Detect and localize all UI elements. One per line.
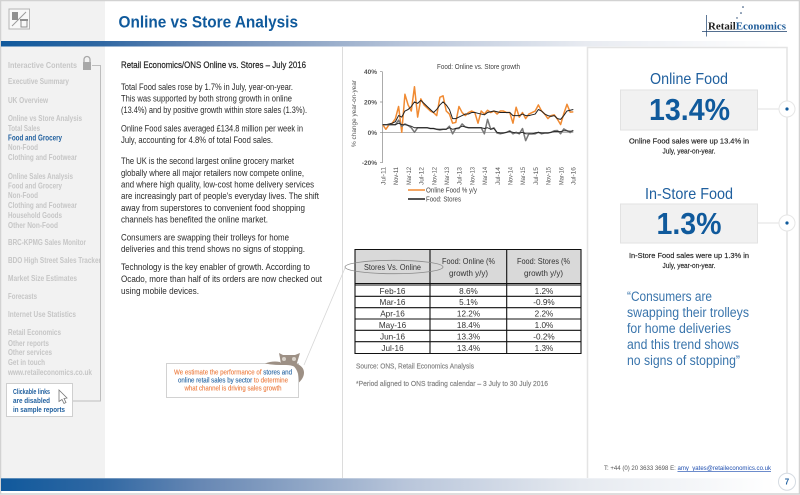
table: stores vs online: 13.4% <box>457 344 480 353</box>
table source notes: *Period aligned to ONS trading calendar – 3 July to 30 July 2016 <box>356 381 548 388</box>
table: stores vs online: 12.2% <box>457 310 480 318</box>
sidebar contents: Interactive Contents <box>8 61 77 70</box>
line chart: online vs store growth: Jul-13 <box>457 167 464 185</box>
line chart: online vs store growth: Jul-15 <box>533 167 540 185</box>
logo: Retail Economics <box>702 6 787 36</box>
text block: retail sales commentary: Total Food sales rose by 1.7% in July, year-on-year. <box>121 82 293 92</box>
line chart: online vs store growth: Nov-13 <box>469 167 476 185</box>
callout: methodology note: what channel is driving sales growth <box>184 386 282 392</box>
table: stores vs online: Jun-16 <box>380 332 405 342</box>
sidebar background <box>0 0 105 478</box>
callout: methodology note: We estimate the performance of stores and <box>174 370 292 376</box>
line chart: online vs store growth: 0% <box>368 130 377 137</box>
table: stores vs online: 1.2% <box>535 287 553 296</box>
text block: retail sales commentary: Retail Economics/ONS Online vs. Stores – July 2016 <box>121 60 306 70</box>
title: Online vs Store Analysis <box>118 12 298 32</box>
line chart: online vs store growth: Jul-16 <box>571 167 578 185</box>
panel: online food: Online Food <box>650 71 728 88</box>
line chart: online vs store growth: Nov-11 <box>393 167 400 185</box>
callout ellipse and leader <box>304 260 443 365</box>
text block: retail sales commentary <box>121 60 322 296</box>
callout: methodology note <box>166 364 298 398</box>
line chart: online vs store growth: Mar-14 <box>482 167 489 185</box>
sidebar contents: Food and Grocery <box>8 182 62 190</box>
table: stores vs online: Jul-16 <box>381 344 404 353</box>
line chart: online vs store growth: Mar-15 <box>520 167 527 185</box>
panel: online food: 13.4% <box>649 92 730 127</box>
pull quote: “Consumers are <box>627 289 712 304</box>
sidebar contents: Clothing and Footwear <box>8 201 77 210</box>
line chart: online vs store growth: Mar-13 <box>444 167 451 185</box>
text block: retail sales commentary: This was supported by both strong growth in online <box>121 94 292 104</box>
text block: retail sales commentary: The UK is the second largest online grocery market <box>121 156 294 166</box>
sidebar contents: Other reports <box>8 339 49 348</box>
line chart: online vs store growth: Nov-12 <box>431 167 438 185</box>
page number: 7 <box>785 478 790 487</box>
icon: padlock <box>83 56 91 70</box>
table: stores vs online: Food: Stores (% <box>517 257 570 266</box>
clickable links notice: Clickable links <box>13 387 50 396</box>
panel: online food <box>620 71 795 156</box>
page number <box>778 473 796 490</box>
text block: retail sales commentary: Online Food sales averaged £134.8 million per week in <box>121 124 303 134</box>
line chart: online vs store growth: Food: Online vs. Store growth <box>437 64 520 71</box>
text block: retail sales commentary: and where high quality, low-cost home delivery services <box>121 180 314 190</box>
sidebar contents: Other services <box>8 348 52 357</box>
sidebar contents <box>7 61 101 377</box>
line chart: online vs store growth: Jul-14 <box>495 167 502 185</box>
pull quote: swapping their trolleys <box>627 305 749 320</box>
sidebar contents: Other Non-Food <box>8 221 58 230</box>
sidebar contents: BRC-KPMG Sales Monitor <box>8 238 86 247</box>
text block: retail sales commentary: (13.4%) and by positive growth within store sales (1.3%). <box>121 105 307 115</box>
text block: retail sales commentary: Technology is the key enabler of growth. According to <box>121 262 310 272</box>
table source notes <box>356 364 548 388</box>
pull quote: and this trend shows <box>627 337 739 352</box>
line chart: online vs store growth: Mar-16 <box>558 167 565 185</box>
footer band <box>1 478 776 491</box>
line chart: online vs store growth: 20% <box>364 100 377 106</box>
table: stores vs online: 5.1% <box>459 298 478 307</box>
pull quote: no signs of stopping” <box>627 353 740 368</box>
clickable links notice: are disabled <box>13 396 50 405</box>
table: stores vs online: 18.4% <box>457 321 480 330</box>
sidebar contents: Executive Summary <box>8 77 69 86</box>
table: stores vs online: -0.2% <box>533 332 555 342</box>
panel: in-store food: July, year-on-year. <box>662 261 716 270</box>
table: stores vs online: growth y/y) <box>449 269 488 278</box>
sidebar contents: Forecasts <box>8 292 37 301</box>
line chart: online vs store growth <box>351 64 578 204</box>
text block: retail sales commentary: away from superstores to convenient food shopping <box>121 203 305 213</box>
pull quote: for home deliveries <box>627 321 731 336</box>
table: stores vs online: 1.3% <box>535 344 553 353</box>
text block: retail sales commentary: Consumers are swapping their trolleys for home <box>121 232 289 242</box>
contact details: T: +44 (0) 20 3633 3698 E: amy_yates@retaileconomics.co.uk <box>604 465 772 472</box>
sidebar contents: Non-Food <box>8 143 38 152</box>
sidebar contents: Household Goods <box>8 211 62 220</box>
icon: online vs store <box>9 9 30 29</box>
clickable links notice: in sample reports <box>13 405 65 414</box>
sidebar contents: www.retaileconomics.co.uk <box>7 368 92 377</box>
callout: methodology note: online retail sales by sector to determine <box>178 378 288 384</box>
panel: in-store food: In-Store Food sales were up 1.3% in <box>629 251 749 260</box>
sidebar contents: Retail Economics <box>8 328 61 337</box>
sidebar bracket line <box>72 66 100 401</box>
line chart: online vs store growth: Online Food % y/y <box>426 188 477 194</box>
sidebar contents: UK Overview <box>8 96 49 105</box>
text block: retail sales commentary: globally where all major retailers now compete online, <box>121 168 304 178</box>
sidebar contents: Food and Grocery <box>8 134 62 142</box>
sidebar contents: Market Size Estimates <box>8 274 77 283</box>
table: stores vs online: Feb-16 <box>380 287 406 296</box>
line chart: online vs store growth: Food: Stores <box>426 196 461 204</box>
table source notes: Source: ONS, Retail Economics Analysis <box>356 364 474 370</box>
header band <box>1 41 781 46</box>
panel: in-store food: In-Store Food <box>645 186 733 203</box>
panel: key figures frame <box>588 48 787 478</box>
sidebar contents: Get in touch <box>8 358 45 367</box>
text block: retail sales commentary: using mobile devices. <box>121 286 199 296</box>
table: stores vs online: 1.0% <box>535 321 553 330</box>
line chart: online vs store growth: 40% <box>364 69 377 76</box>
table: stores vs online: Stores Vs. Online <box>364 263 421 272</box>
panel: in-store food: 1.3% <box>656 206 722 241</box>
text block: retail sales commentary: Ocado, more than half of its orders are now checked out <box>121 274 322 284</box>
table: stores vs online: -0.9% <box>533 298 555 307</box>
table: stores vs online: 8.6% <box>459 287 478 296</box>
sidebar contents: Internet Use Statistics <box>8 310 76 319</box>
text block: retail sales commentary: deliveries and this trend shows no signs of stopping. <box>121 244 305 254</box>
column divider <box>342 47 344 478</box>
table: stores vs online: Mar-16 <box>380 298 406 307</box>
table: stores vs online: 13.3% <box>457 332 480 342</box>
sidebar contents: Total Sales <box>8 124 40 133</box>
logo: Retail Economics: RetailEconomics <box>708 20 787 32</box>
sidebar contents: BDO High Street Sales Tracker <box>8 256 101 265</box>
sidebar contents: Online Sales Analysis <box>8 172 73 181</box>
line chart: online vs store growth: Jul-12 <box>419 167 426 185</box>
line chart: online vs store growth: Jul-11 <box>380 167 388 185</box>
line chart: online vs store growth: Nov-14 <box>508 167 514 185</box>
sidebar contents: Online vs Store Analysis <box>8 114 82 123</box>
table: stores vs online: growth y/y) <box>524 269 563 278</box>
line chart: online vs store growth: % change year-on-year <box>351 79 358 147</box>
icon: owl <box>265 353 304 382</box>
text block: retail sales commentary: channels has benefited the online market. <box>121 214 268 224</box>
table: stores vs online: Food: Online (% <box>442 257 495 266</box>
line chart: online vs store growth: Nov-15 <box>546 167 553 185</box>
line chart: online vs store growth: Mar-12 <box>406 167 413 185</box>
clickable links notice <box>6 384 72 416</box>
pull quote <box>627 289 749 368</box>
line chart: online vs store growth: -20% <box>362 160 377 167</box>
sidebar contents: Non-Food <box>8 191 38 200</box>
panel: online food: July, year-on-year. <box>662 146 716 156</box>
table: stores vs online: Apr-16 <box>380 310 405 318</box>
table: stores vs online: 2.2% <box>535 310 553 318</box>
panel: in-store food <box>620 186 795 270</box>
text block: retail sales commentary: are increasingly part of people's everyday lives. The shift <box>121 191 319 201</box>
panel: online food: Online Food sales were up 13.4% in <box>629 136 749 146</box>
text block: retail sales commentary: July, accounting for 4.8% of total Food sales. <box>121 135 273 145</box>
sidebar contents: Clothing and Footwear <box>8 153 77 162</box>
table: stores vs online <box>355 249 581 354</box>
table: stores vs online: May-16 <box>379 321 407 330</box>
